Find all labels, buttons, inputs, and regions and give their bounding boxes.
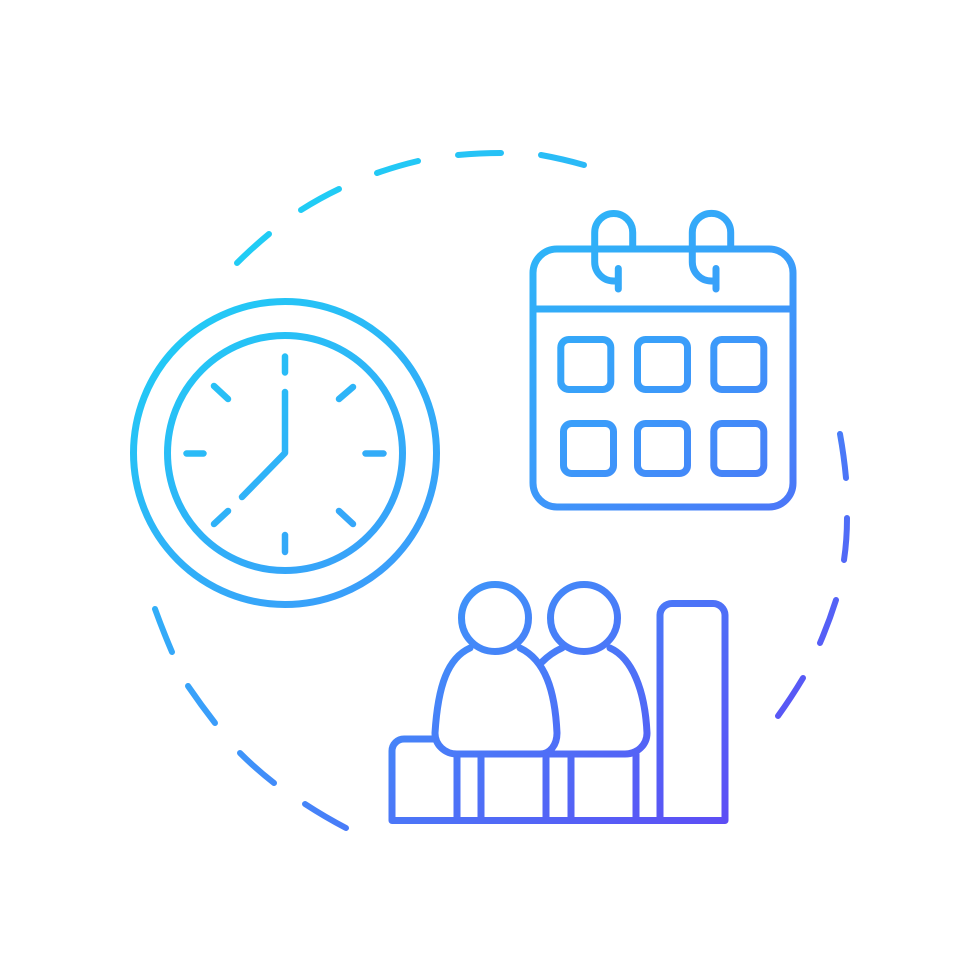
person head right xyxy=(550,584,618,652)
bar chart xyxy=(392,603,725,820)
icon: two people on a bar chart xyxy=(392,584,725,820)
person body right xyxy=(542,648,647,754)
icon: clock xyxy=(134,302,436,604)
icon: calendar xyxy=(533,213,793,507)
person body left xyxy=(435,648,557,754)
person head left xyxy=(462,584,528,652)
dashed circle xyxy=(155,153,847,828)
